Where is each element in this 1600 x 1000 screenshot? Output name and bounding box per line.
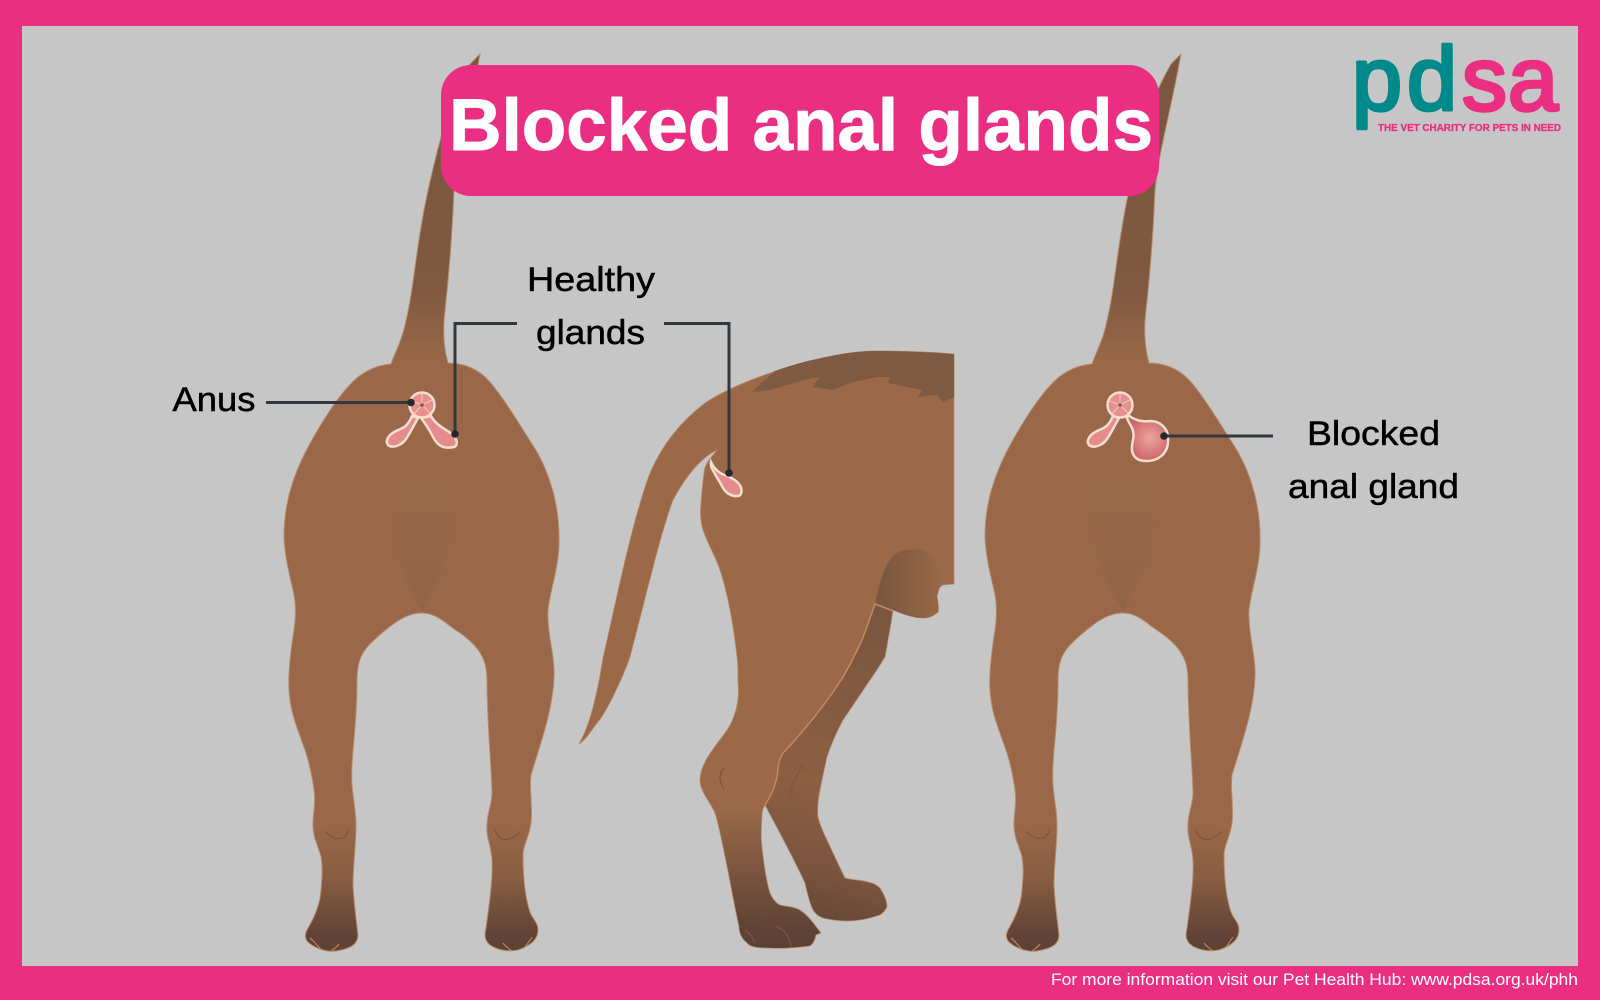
logo wordmark: p xyxy=(1352,30,1402,130)
leg seam xyxy=(765,604,893,805)
logo wordmark: a xyxy=(1508,30,1559,130)
title banner xyxy=(441,65,1159,196)
leader line: side view healthy gland xyxy=(664,324,733,477)
label: Anus: Anus xyxy=(172,381,256,419)
leader line: rear view healthy gland xyxy=(451,324,517,438)
belly shadow xyxy=(875,549,940,618)
dog side view xyxy=(579,351,954,948)
right dog glands: one blocked xyxy=(1088,392,1168,461)
body, tail and near hind leg xyxy=(579,351,954,948)
left anal gland xyxy=(387,416,418,447)
leg and paw creases xyxy=(1011,829,1233,951)
title background xyxy=(441,65,1159,196)
dark back patch xyxy=(752,351,954,402)
dog body rear view left xyxy=(284,54,559,951)
title text: Blocked anal glands xyxy=(449,85,1153,166)
blocked anal gland xyxy=(1127,415,1168,461)
dog rear view: blocked gland xyxy=(985,54,1260,951)
logo wordmark: s xyxy=(1462,30,1507,130)
knee creases xyxy=(720,764,802,947)
pdsa logo xyxy=(1352,30,1561,134)
healthy left gland xyxy=(1088,416,1119,447)
label: Blocked anal gland: anal gland xyxy=(1288,468,1459,506)
leader line: blocked gland xyxy=(1160,432,1273,440)
logo tagline: THE VET CHARITY FOR PETS IN NEED xyxy=(1378,123,1561,134)
label: Healthy glands: glands xyxy=(536,314,645,352)
dog body rear view right xyxy=(985,54,1260,951)
leader line: anus xyxy=(266,399,415,406)
label: Healthy glands: Healthy xyxy=(527,261,655,299)
footer note: For more information visit our Pet Health Hub: www.pdsa.org.uk/phh xyxy=(1051,970,1578,989)
far hind leg xyxy=(765,604,893,921)
dog rear view: healthy xyxy=(284,54,559,951)
centre fold xyxy=(1085,470,1161,611)
centre fold xyxy=(384,470,460,611)
anus xyxy=(410,392,434,418)
logo wordmark: d xyxy=(1407,30,1457,130)
label: Healthy glands xyxy=(527,261,655,352)
label: Blocked anal gland: Blocked xyxy=(1307,415,1440,453)
anus xyxy=(1108,392,1132,418)
side healthy gland xyxy=(711,462,742,496)
right anal gland xyxy=(421,416,457,448)
left dog glands: healthy xyxy=(387,392,457,448)
label: Blocked anal gland xyxy=(1288,415,1459,506)
leg and paw creases xyxy=(310,829,532,951)
